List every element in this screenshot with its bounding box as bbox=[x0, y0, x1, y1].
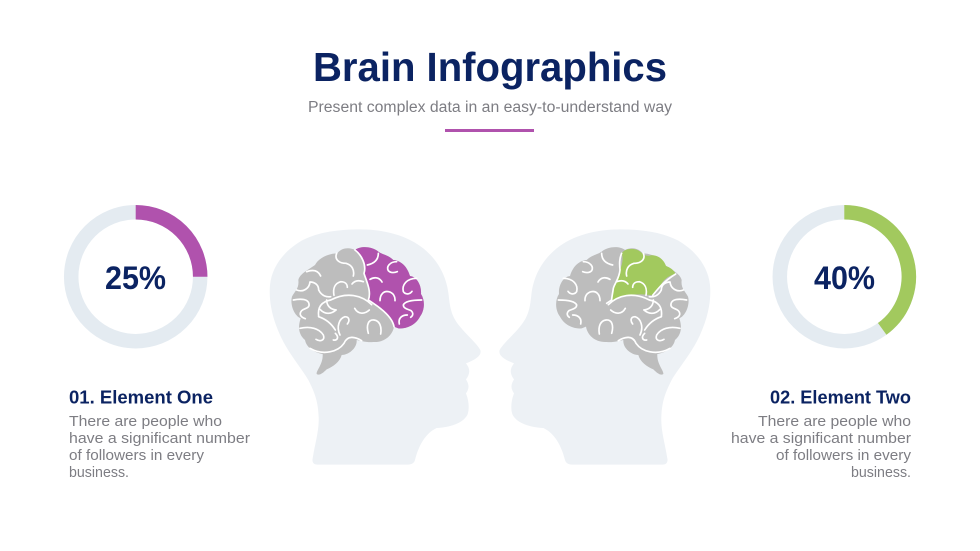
subtitle: Present complex data in an easy-to-understand way bbox=[308, 99, 672, 116]
text block: element two bbox=[731, 388, 912, 481]
text block: element two: business. bbox=[851, 465, 911, 481]
text block: element two: There are people who bbox=[758, 414, 911, 430]
brain folds (mirrored) bbox=[558, 253, 687, 352]
right head with green brain bbox=[499, 229, 710, 465]
accent underline bbox=[445, 129, 534, 132]
brain: grey lobes (mirrored) bbox=[556, 247, 689, 375]
head silhouette bbox=[270, 229, 481, 465]
brain: purple frontal lobe bbox=[355, 247, 424, 328]
text block: element one: have a significant number bbox=[69, 431, 250, 447]
donut chart: 25%: 25% bbox=[105, 260, 166, 296]
donut chart: 25% bbox=[71, 212, 200, 341]
text block: element one: There are people who bbox=[69, 414, 222, 430]
donut chart: 40%: 40% bbox=[814, 260, 875, 296]
donut chart: 40% bbox=[780, 212, 909, 341]
brain: grey lobes bbox=[291, 247, 424, 375]
text block: element one: 01. Element One bbox=[69, 388, 213, 408]
head silhouette (mirrored) bbox=[499, 229, 710, 465]
text block: element one bbox=[69, 388, 250, 481]
text block: element two: of followers in every bbox=[776, 448, 912, 464]
brain: green frontal lobe bbox=[612, 249, 676, 301]
text block: element one: business. bbox=[69, 465, 129, 481]
title: Brain Infographics bbox=[313, 44, 667, 90]
text block: element one: of followers in every bbox=[69, 448, 205, 464]
text block: element two: have a significant number bbox=[731, 431, 911, 447]
left head with purple brain bbox=[270, 229, 481, 465]
text block: element two: 02. Element Two bbox=[770, 388, 911, 408]
brain folds bbox=[293, 250, 422, 352]
